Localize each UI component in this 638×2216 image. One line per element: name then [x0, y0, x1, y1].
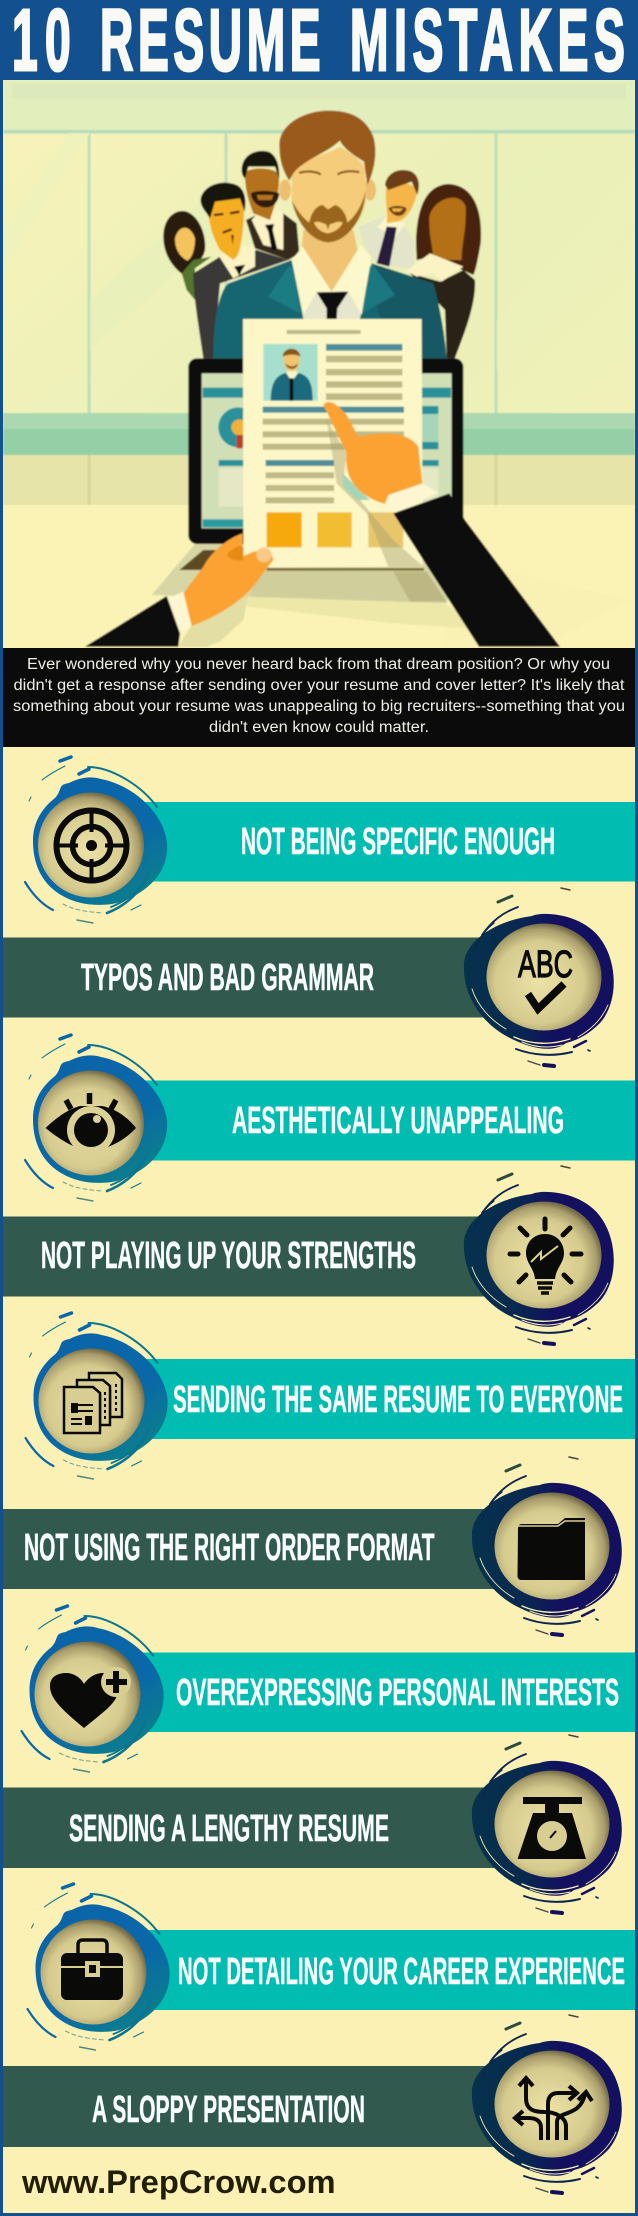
- icon: abc check: ABC: [518, 944, 573, 986]
- website footer: www.PrepCrow.com: [21, 2163, 336, 2200]
- mistake 7: personal interests: [22, 1606, 635, 1772]
- brush ring: [25, 757, 167, 923]
- banner: [140, 1930, 635, 2010]
- man back: [242, 151, 299, 260]
- man right: [358, 170, 419, 270]
- title banner: [0, 0, 638, 89]
- banner: [140, 1359, 635, 1439]
- banner: [140, 1652, 635, 1732]
- icon: abc check: [518, 944, 573, 1009]
- brush ring: [464, 1166, 614, 1344]
- resume sheet: [243, 319, 423, 567]
- intro text panel: didn't even know could matter.: [209, 719, 429, 736]
- mistake 6: order format: [3, 1457, 622, 1635]
- label: SENDING A LENGTHY RESUME: [69, 1808, 389, 1850]
- intro text panel: Ever wondered why you never heard back from that dream position? Or why you: [27, 656, 610, 673]
- banner: [140, 802, 635, 882]
- office wall background: [3, 80, 635, 647]
- icon: scale: [518, 1797, 586, 1859]
- banner: [3, 1788, 498, 1868]
- icon: target: [54, 808, 129, 883]
- brush ring: [22, 1606, 164, 1772]
- suit: [213, 260, 447, 358]
- woman left: [163, 211, 212, 300]
- resume photo: [263, 344, 318, 401]
- main man: [213, 111, 447, 358]
- mistake 5: same resume: [26, 1313, 635, 1479]
- intro text panel: something about your resume was unappealing to big recruiters--something that you: [13, 698, 625, 715]
- banner: [140, 1080, 635, 1160]
- mistake 4: strengths: [3, 1166, 614, 1344]
- woman right: [406, 184, 481, 358]
- intro text panel: [3, 648, 635, 747]
- panel: hero illustration: [3, 80, 635, 647]
- man far left: [193, 183, 288, 358]
- mistake 10: sloppy presentation: [3, 2015, 622, 2193]
- mistake 1: not being specific: [25, 757, 635, 923]
- brush ring: [472, 1735, 622, 1913]
- shirt and tie: [292, 245, 371, 320]
- banner: [3, 1216, 493, 1296]
- banner: [3, 1509, 498, 1589]
- label: TYPOS AND BAD GRAMMAR: [81, 957, 374, 999]
- ears and neck: [279, 179, 376, 293]
- laptop: [152, 358, 493, 630]
- intro text panel: didn't get a response after sending over your resume and cover letter? It's likely that: [14, 677, 625, 694]
- label: A SLOPPY PRESENTATION: [92, 2089, 365, 2131]
- brush ring: [28, 1884, 170, 2050]
- icon: diverging arrows: [515, 2078, 592, 2140]
- icon: documents: [64, 1373, 122, 1433]
- resume heading line: [287, 330, 361, 334]
- resume colour squares: [267, 512, 403, 547]
- icon: briefcase: [61, 1940, 123, 2000]
- icon: eye: [46, 1093, 136, 1156]
- title: [12, 0, 631, 89]
- icon: light bulb: [510, 1219, 581, 1293]
- brush ring: [464, 888, 614, 1066]
- mistake 2: typos: [3, 888, 614, 1066]
- brush ring: [472, 1457, 622, 1635]
- icon: heart plus: [50, 1667, 131, 1728]
- brush ring: [472, 2015, 622, 2193]
- hand: holding: [85, 533, 273, 647]
- mistake 8: lengthy resume: [3, 1735, 622, 1913]
- banner: [3, 2066, 498, 2147]
- brush ring: [26, 1313, 168, 1479]
- hand: pointing: [323, 402, 560, 647]
- mistake 3: aesthetics: [25, 1035, 635, 1201]
- icon: folder: [517, 1518, 586, 1580]
- mistake 9: career experience: [28, 1884, 635, 2050]
- resume text lines: [263, 344, 404, 503]
- banner: [3, 938, 493, 1018]
- brush ring: [25, 1035, 167, 1201]
- head: [292, 147, 366, 242]
